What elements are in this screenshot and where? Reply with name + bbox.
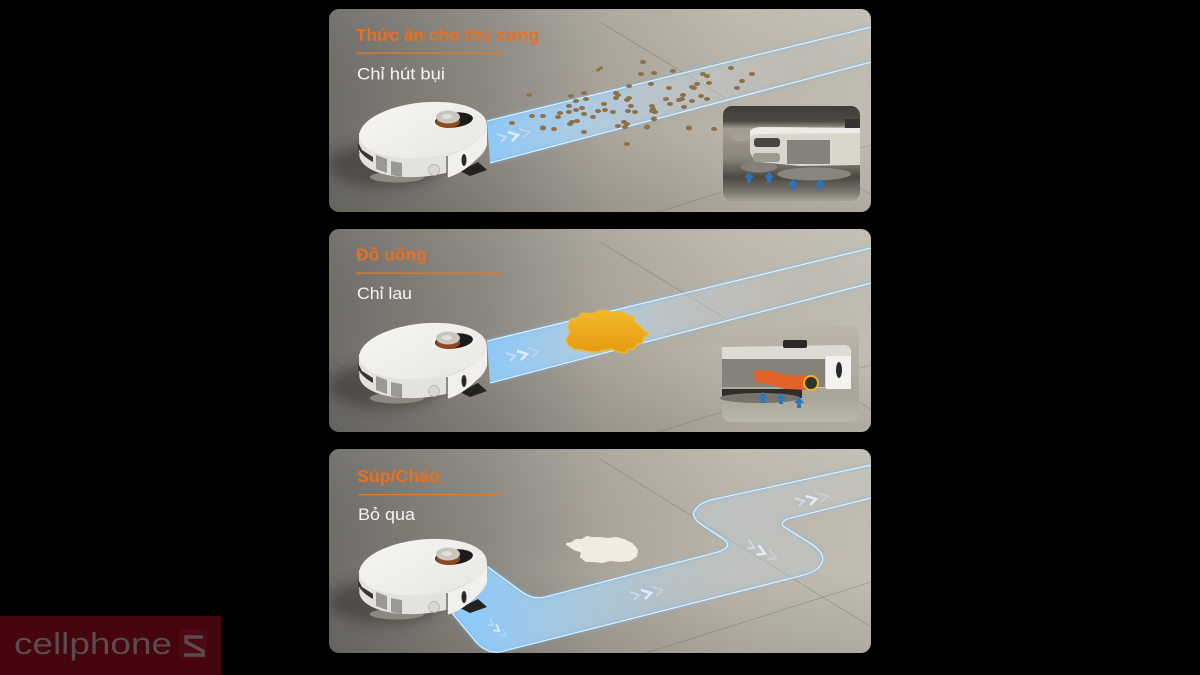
floor shading [329, 166, 871, 212]
blue up arrows [758, 392, 804, 408]
direction chevrons [486, 493, 828, 641]
heading: drinks: Đồ uống [356, 244, 427, 264]
tile lines [329, 22, 871, 212]
tile lines [329, 459, 871, 653]
blue up arrows [744, 172, 825, 190]
floor [329, 229, 871, 432]
cleaning path beam [487, 248, 871, 383]
cleaning path beam [487, 27, 871, 163]
tile lines [329, 242, 871, 432]
pet food kibble [509, 60, 755, 146]
panel: drinks, mop only [327, 229, 871, 432]
spilled soup [567, 537, 637, 562]
inset: mop lifted [723, 106, 860, 201]
logo text: cellphone [14, 626, 172, 661]
panel: pet food, vacuum only [327, 9, 871, 212]
floor shading [329, 607, 871, 653]
heading: soup: Súp/Cháo [357, 466, 440, 486]
subtitle: skip: Bỏ qua [358, 505, 416, 524]
floor shading [329, 386, 871, 432]
avoidance path beam [452, 465, 871, 652]
robot vacuum [327, 317, 490, 408]
direction chevrons [497, 129, 530, 142]
logo S mark [179, 629, 207, 659]
direction chevrons [506, 348, 539, 361]
robot vacuum [327, 533, 490, 624]
lifted mop pads [730, 133, 851, 180]
heading underline [358, 494, 503, 495]
robot vacuum [327, 96, 490, 187]
heading: pet food: Thức ăn cho thú cưng [356, 25, 539, 45]
inset: brush lifted [720, 326, 859, 422]
subtitle: mop only: Chỉ lau [357, 284, 412, 303]
panel: soup, skip [327, 449, 871, 653]
spilled drink [566, 310, 649, 353]
floor [329, 449, 871, 653]
robot cutaway [720, 340, 851, 403]
orange roller brush [754, 370, 818, 390]
floor [329, 9, 871, 212]
subtitle: vacuum only: Chỉ hút bụi [357, 64, 445, 84]
watermark logo [0, 616, 221, 675]
robot side view [750, 119, 860, 166]
heading underline [356, 272, 502, 274]
heading underline [356, 52, 502, 54]
